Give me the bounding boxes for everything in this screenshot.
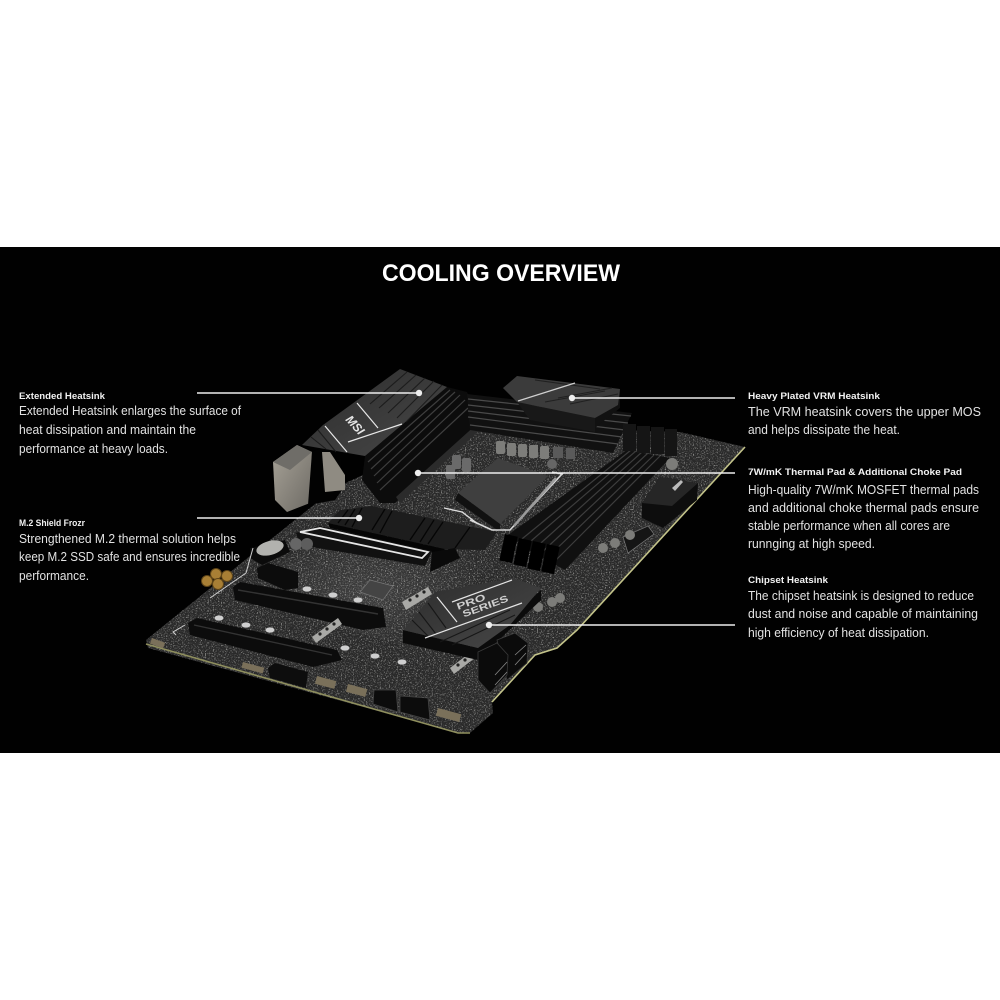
rear IO shield — [273, 440, 345, 512]
text block: M.2 Shield Frozr: M.2 Shield Frozr — [19, 518, 85, 529]
title: COOLING OVERVIEW — [382, 260, 620, 287]
VRM heatsink — [503, 376, 620, 432]
text block: M.2 Shield Frozr: performance. — [19, 569, 89, 583]
text block: Heavy Plated VRM Heatsink: The VRM heatsink covers the upper MOS — [748, 405, 981, 419]
DIMM slots — [499, 424, 677, 574]
text block: Chipset Heatsink: Chipset Heatsink — [748, 575, 829, 586]
silver capacitors — [533, 458, 678, 612]
top PCIe slot — [296, 526, 460, 572]
text block: thermal pad: and additional choke thermal pads ensure — [748, 501, 979, 515]
text block: Extended Heatsink: Extended Heatsink — [19, 391, 106, 402]
PRO SERIES logo: SERIES — [461, 593, 510, 620]
callout: VRM heatsink line — [569, 395, 735, 401]
chokes row — [446, 441, 575, 479]
text block: M.2 Shield Frozr: keep M.2 SSD safe and ensures incredible — [19, 550, 240, 564]
rear VRM fins — [467, 394, 632, 453]
heatsink fins — [362, 387, 482, 503]
text block: Extended Heatsink: heat dissipation and maintain the — [19, 423, 196, 437]
callout: extended heatsink line — [197, 390, 422, 396]
PRO SERIES logo: PRO — [455, 592, 487, 613]
text block: Extended Heatsink: Extended Heatsink enlarges the surface of — [19, 404, 241, 418]
text block: thermal pad: 7W/mK Thermal Pad & Additional Choke Pad — [748, 467, 962, 478]
24-pin connector — [642, 477, 698, 528]
text block: Heavy Plated VRM Heatsink — [748, 391, 981, 437]
bottom SATA connectors — [373, 690, 430, 720]
PCIe x1 slot — [257, 563, 298, 590]
gold capacitors — [202, 568, 232, 590]
text block: Chipset Heatsink: dust and noise and capable of maintaining — [748, 607, 978, 621]
black background panel — [0, 247, 1000, 753]
heatsink top plate — [302, 369, 447, 456]
text block: Heavy Plated VRM Heatsink: Heavy Plated VRM Heatsink — [748, 391, 881, 402]
white traces — [173, 548, 253, 635]
callout: thermal pad line — [415, 470, 735, 476]
CMOS battery — [250, 538, 313, 565]
8-pin connector — [623, 526, 654, 553]
chipset heatsink — [403, 578, 541, 660]
board mount holes — [214, 586, 406, 665]
CPU socket — [444, 458, 562, 532]
callout: M.2 shield line — [197, 515, 362, 521]
callout: chipset heatsink line — [486, 622, 735, 628]
SATA ports stacked — [478, 633, 528, 693]
PCB — [146, 425, 745, 733]
text block: Chipset Heatsink — [748, 575, 978, 640]
text block: Extended Heatsink: performance at heavy loads. — [19, 442, 168, 456]
text block: thermal pad: runnging at high speed. — [748, 537, 875, 551]
M.2 standoff brackets — [312, 587, 480, 674]
text block: Heavy Plated VRM Heatsink: and helps dissipate the heat. — [748, 423, 900, 437]
PRO SERIES logo — [455, 585, 510, 621]
M.2 Shield Frozr — [328, 506, 497, 554]
front panel headers — [150, 638, 461, 722]
text block: Chipset Heatsink: The chipset heatsink is designed to reduce — [748, 589, 974, 603]
text block: thermal pad — [748, 467, 979, 551]
text block: Extended Heatsink — [19, 391, 241, 456]
text block: thermal pad: stable performance when all cores are — [748, 519, 950, 533]
PCIe x16 slot lower — [188, 618, 342, 667]
text block: M.2 Shield Frozr — [19, 518, 240, 583]
text block: Chipset Heatsink: high efficiency of heat dissipation. — [748, 626, 929, 640]
motherboard illustration — [146, 369, 745, 733]
text block: M.2 Shield Frozr: Strengthened M.2 thermal solution helps — [19, 532, 236, 546]
MSI logo: MSI — [343, 413, 368, 438]
chip — [360, 580, 393, 600]
PCIe x16 slot middle — [233, 582, 386, 630]
extended heatsink — [302, 369, 482, 503]
text block: thermal pad: High-quality 7W/mK MOSFET thermal pads — [748, 483, 979, 497]
